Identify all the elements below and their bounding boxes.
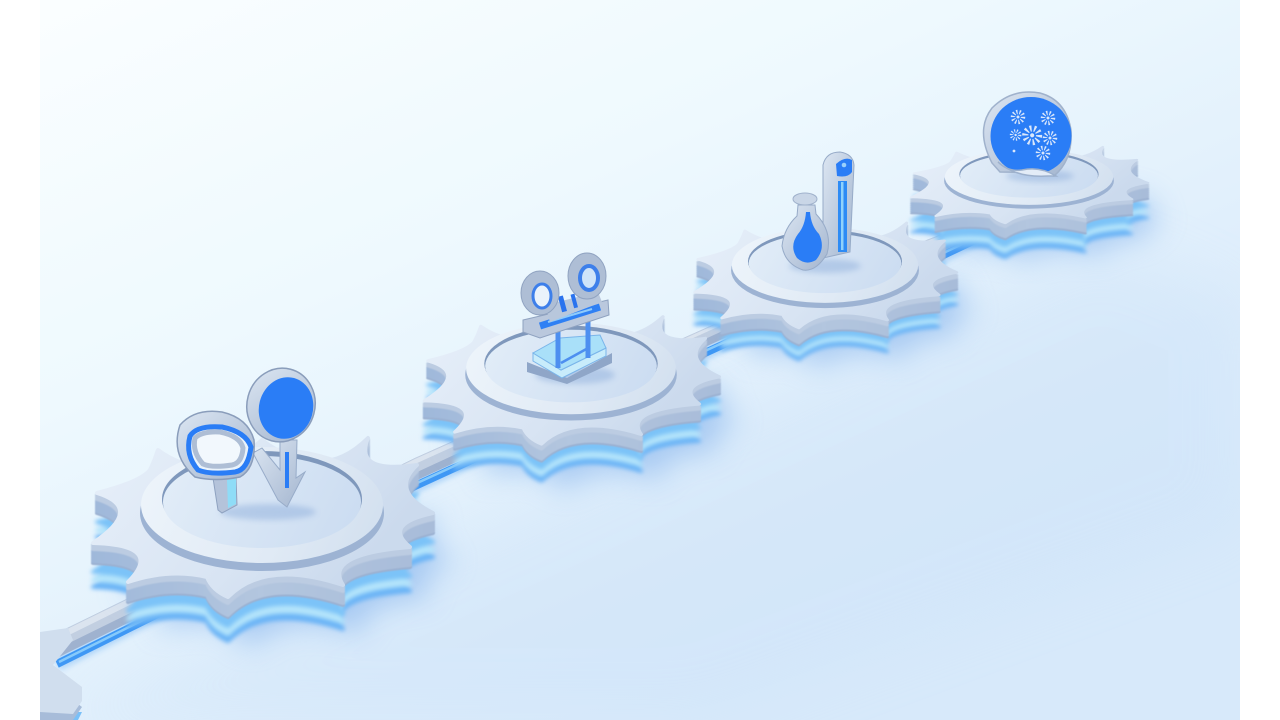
gear 3 — [695, 223, 979, 368]
icon: film projector — [521, 253, 615, 384]
icon: magnifier ring and pin arrow — [177, 360, 323, 520]
glowing blue guide line — [57, 238, 975, 664]
gear 1 — [93, 438, 457, 647]
soft diagonal shadow under the chain — [60, 240, 1240, 720]
icon: flask and thermometer — [782, 152, 861, 273]
gear 4 — [911, 147, 1168, 261]
icon: petri dish with microbes — [984, 92, 1074, 182]
grey connector tube — [57, 218, 975, 658]
gear 2 — [424, 317, 743, 490]
partial gear at left edge — [40, 628, 82, 720]
